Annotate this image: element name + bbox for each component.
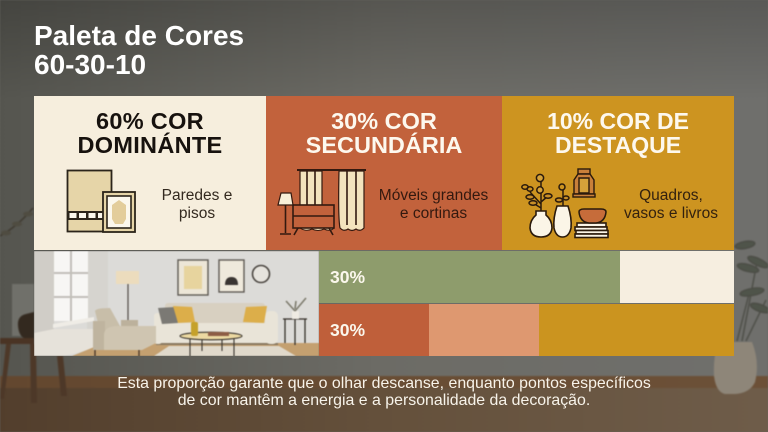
sofa [165, 303, 265, 325]
heading: 10% cor de destaque: DESTAQUE [555, 132, 681, 158]
heading: 10% cor de destaque [547, 108, 689, 158]
text: large furniture and curtains [379, 187, 488, 222]
label: 30%: 30% [330, 267, 365, 287]
pictures [178, 260, 208, 295]
panel: 30% secondary colour [266, 96, 502, 250]
side table and plant [283, 319, 307, 345]
icon: wall and picture frame [66, 170, 136, 233]
title: Paleta de Cores [34, 20, 244, 51]
window [54, 251, 88, 321]
text: walls and floors: pisos [179, 204, 215, 222]
heading: 60% cor dominante: 60% COR [96, 108, 204, 134]
text: large furniture and curtains: e cortinas [400, 204, 467, 222]
caption [117, 375, 651, 408]
text: pictures, vases and books: Quadros, [639, 187, 703, 204]
floor and rug [72, 343, 319, 356]
label: 30%: 30% [330, 320, 365, 340]
icon: curtains, armchair and lamp [277, 169, 366, 236]
text: walls and floors: Paredes e [162, 187, 232, 204]
panel: 60% dominant colour [34, 96, 266, 250]
heading: 30% cor secundaria: SECUNDÁRIA [306, 132, 462, 158]
text: walls and floors [162, 187, 232, 222]
heading: 30% cor secundaria [306, 108, 462, 158]
heading: 60% cor dominante: DOMINÁNTE [78, 132, 222, 158]
photo: living room [34, 251, 319, 356]
armchair [95, 308, 120, 333]
caption: de cor mantêm a energia e a personalidade da decoração. [178, 392, 590, 408]
panel: 10% accent colour [502, 96, 734, 250]
lamp [116, 271, 139, 284]
bar: green segment 30% [319, 251, 620, 303]
caption: Esta proporção garante que o olhar descanse, enquanto pontos específicos [117, 375, 651, 392]
bar: cream segment [620, 251, 734, 303]
text: pictures, vases and books: vasos e livros [624, 204, 718, 222]
coffee table [190, 339, 234, 356]
bar: terracotta segment 30% [319, 304, 429, 356]
text: large furniture and curtains: Móveis grandes [379, 187, 488, 204]
heading: 10% cor de destaque: 10% COR DE [547, 108, 689, 134]
title: 60-30-10 [34, 48, 146, 80]
text: pictures, vases and books [624, 187, 718, 222]
heading: 30% cor secundaria: 30% COR [331, 108, 437, 134]
title [34, 20, 244, 80]
heading: 60% cor dominante [78, 108, 222, 158]
bar: gold segment [539, 304, 734, 356]
icon: vases, books and lantern [521, 168, 609, 238]
bar: peach segment [429, 304, 539, 356]
